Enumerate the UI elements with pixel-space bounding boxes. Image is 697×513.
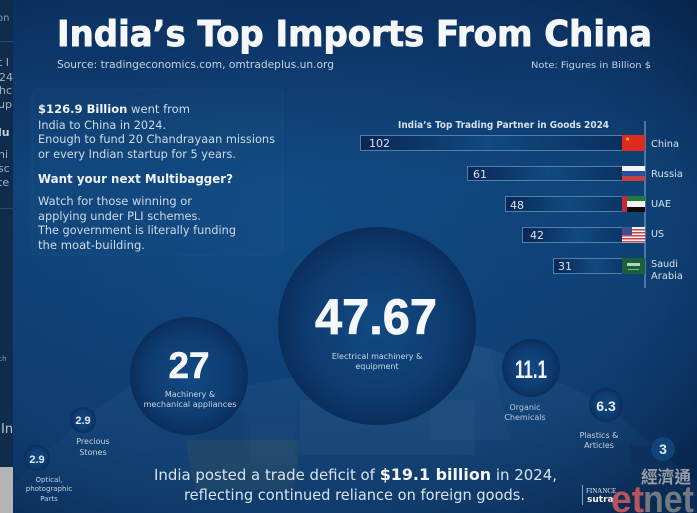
bar: Russia: [468, 166, 683, 181]
chart heading: India’s Top Trading Partner in Goods 2024: [398, 120, 609, 131]
bubble: machinery: 27: [168, 345, 210, 386]
bubble: optical parts: photographic: [26, 485, 72, 493]
bubble: plastics: 6.3: [596, 398, 616, 414]
bar: UAE: 48: [510, 199, 524, 212]
watermark: etnet: [611, 463, 694, 513]
bubble: organic chemicals: Organic: [509, 403, 541, 412]
subheading: Want your next Multibagger?: [38, 171, 233, 186]
bar: US: 42: [530, 229, 544, 242]
paragraph: PLI schemes: the moat-building.: [38, 238, 145, 252]
trade deficit statement: India posted a trade deficit of $19.1 billion in 2024,: [154, 465, 557, 484]
bar: China: China: [651, 139, 679, 150]
bar: Saudi Arabia: [554, 258, 683, 282]
paragraph: trade amount: India to China in 2024.: [38, 118, 166, 132]
bubble: plastics: Plastics &: [580, 431, 618, 440]
source line: Source: tradingeconomics.com, omtradeplus.un.org: [57, 59, 334, 71]
title: India’s Top Imports From China: [57, 14, 652, 55]
logo: Finance Sutra: sutra: [587, 495, 614, 505]
bubble: precious stones: 2.9: [75, 415, 91, 427]
axis: [644, 121, 646, 288]
watermark: etnet: 經濟通: [641, 463, 691, 488]
note: Note: Figures in Billion $: [531, 61, 651, 71]
panel: multibagger text: [32, 89, 283, 255]
bar: UAE: UAE: [651, 199, 671, 210]
bubble: plastics: [580, 388, 623, 450]
bar: China: [360, 135, 679, 151]
paragraph: trade amount: $126.9 Billion went from: [38, 102, 190, 116]
bar: Saudi Arabia: 31: [558, 260, 572, 273]
bubble: machinery: Machinery &: [165, 390, 215, 399]
background hill with faded port scene: [12, 340, 697, 513]
bubble: electrical machinery: equipment: [355, 362, 399, 371]
bubble: optical parts: 2.9: [29, 454, 45, 466]
paragraph: PLI schemes: [37, 194, 236, 252]
logo: Finance Sutra: FINANCE: [586, 487, 616, 495]
bubble: electrical machinery: Electrical machinery &: [332, 352, 422, 361]
bar: Saudi Arabia: Arabia: [651, 271, 683, 282]
trade deficit statement: [154, 465, 557, 504]
bar: Russia: 61: [473, 168, 487, 181]
bubble: value 3: [651, 437, 675, 461]
bubble: electrical machinery: 47.67: [315, 289, 437, 345]
left edge strip: neighbouring page: [0, 0, 13, 513]
logo: Finance Sutra: [582, 485, 616, 505]
bar: Russia: Russia: [651, 169, 683, 180]
bubble: machinery: [130, 317, 248, 435]
bubble: machinery: mechanical appliances: [144, 400, 236, 409]
paragraph: PLI schemes: Watch for those winning or: [38, 194, 192, 208]
trade deficit statement: reflecting continued reliance on foreign goods.: [184, 486, 525, 504]
bubble: electrical machinery: [278, 227, 476, 425]
bubble: organic chemicals: Chemicals: [504, 413, 546, 422]
paragraph: PLI schemes: The government is literally funding: [37, 223, 236, 237]
bubble: organic chemicals: 11.1: [515, 356, 547, 384]
bar: China: ★: [625, 136, 630, 143]
bubble: precious stones: [70, 407, 110, 457]
bar: UAE: [506, 196, 671, 212]
bar chart: top trading partners: [360, 120, 683, 288]
bubble: optical parts: [24, 445, 72, 503]
bar: China: 102: [369, 137, 390, 150]
bar: Saudi Arabia: Saudi: [651, 259, 678, 270]
paragraph: PLI schemes: applying under PLI schemes.: [38, 209, 201, 223]
bubble: precious stones: Precious: [76, 437, 110, 446]
bubble: plastics: Articles: [584, 441, 614, 450]
bar: US: [522, 227, 664, 243]
bubble: precious stones: Stones: [79, 448, 107, 457]
paragraph: trade amount: [38, 102, 275, 161]
bar: US: US: [651, 229, 664, 240]
bubble: optical parts: Parts: [40, 495, 58, 503]
left edge strip: neighbouring page: In: [1, 422, 13, 437]
bubble: organic chemicals: [502, 339, 560, 422]
paragraph: trade amount: Enough to fund 20 Chandrayaan missions: [38, 132, 275, 146]
bubble: value 3: 3: [659, 441, 667, 457]
bubble: optical parts: Optical,: [36, 476, 62, 484]
paragraph: trade amount: or every Indian startup for 5 years.: [38, 147, 236, 161]
